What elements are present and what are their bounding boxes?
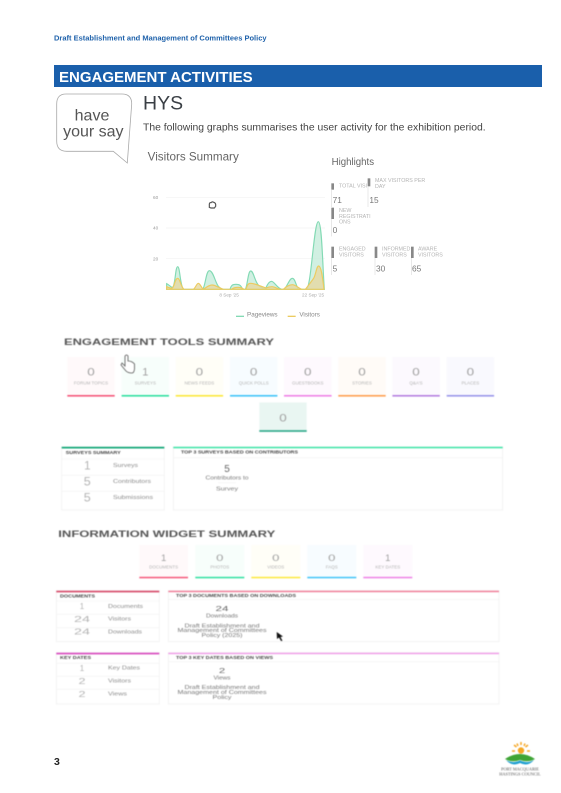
chart legend (236, 311, 320, 318)
panel: top key dates by views: 2 (219, 666, 225, 675)
panel: top key dates by views (168, 653, 499, 704)
card: photos (195, 545, 244, 578)
card: videos: 0 (272, 553, 279, 564)
heading: visitors summary: Visitors Summary (148, 150, 239, 163)
card: forum topics: FORUM TOPICS (74, 380, 108, 386)
card: places (447, 357, 494, 397)
area chart: 40 (153, 226, 159, 231)
card: key dates: KEY DATES (375, 564, 400, 569)
card: stories (338, 357, 386, 397)
panel: surveys summary: SURVEYS SUMMARY (66, 450, 121, 455)
panel: surveys summary: 1 (84, 460, 91, 472)
card: FAQs: FAQS (326, 564, 338, 569)
card: photos: 0 (216, 553, 223, 564)
card: extra tool: 0 (279, 412, 287, 424)
panel: top surveys by contributors: Survey (216, 487, 238, 493)
panel: top surveys by contributors: TOP 3 SURVEYS BASED ON CONTRIBUTORS (181, 450, 298, 455)
stat: aware visitors: 65 (412, 263, 422, 273)
intro text: The following graphs summarises the user activity for the exhibition period. (143, 122, 486, 134)
chart legend: Visitors (299, 311, 320, 318)
card: stories: STORIES (352, 380, 372, 386)
panel: surveys summary: Submissions (113, 495, 153, 501)
card: news feeds: NEWS FEEDS (185, 380, 214, 386)
stat: new registrations (331, 208, 371, 236)
icon: have your say speech bubble (57, 94, 132, 163)
panel: top surveys by contributors: Contributors to (206, 475, 248, 481)
stat: aware visitors: AWARE (418, 247, 438, 253)
card: surveys: 1 (142, 367, 148, 379)
stat: aware visitors (411, 247, 443, 275)
card: news feeds: 0 (196, 367, 203, 379)
stat: engaged visitors: ENGAGED (339, 247, 366, 253)
logo: Port Macquarie Hastings Council: PORT MACQUARIE (501, 766, 539, 772)
panel: top key dates by views: Management of Committees (178, 690, 267, 696)
panel: key dates: 1 (80, 664, 85, 673)
panel: documents (56, 591, 159, 642)
panel: top documents by downloads: Draft Establishment and (184, 623, 260, 629)
heading: highlights: Highlights (332, 157, 374, 168)
panel: documents: Downloads (108, 630, 142, 636)
card: quick polls: QUICK POLLS (239, 380, 269, 386)
panel: top documents by downloads: 24 (216, 604, 228, 613)
card: surveys (122, 357, 169, 397)
card: key dates (363, 545, 412, 578)
card: guestbooks (284, 357, 332, 397)
card: FAQs: 0 (328, 553, 335, 564)
panel: surveys summary: 5 (84, 493, 91, 505)
panel: key dates: Key Dates (108, 666, 140, 672)
panel: surveys summary: 5 (84, 477, 91, 489)
icon: have your say speech bubble: have (75, 107, 109, 124)
panel: top key dates by views: Views (214, 675, 231, 681)
card: quick polls: 0 (250, 367, 257, 379)
heading: HYS: HYS (143, 92, 183, 114)
card: documents: DOCUMENTS (149, 564, 178, 569)
panel: information widget summary (56, 529, 499, 704)
panel: visitors summary and highlights (148, 150, 443, 318)
area chart: 20 (153, 256, 159, 261)
icon: grab hand cursor (209, 202, 216, 208)
card: stories: 0 (358, 367, 366, 379)
chart legend: Pageviews (247, 311, 278, 318)
panel: key dates: 2 (78, 677, 86, 686)
card: extra tool (259, 402, 307, 432)
card: places: 0 (467, 367, 474, 379)
panel: top documents by downloads: Policy (2025) (202, 633, 243, 639)
stat: new registrations: NEW (339, 208, 352, 214)
card: Q&As: Q&A'S (409, 380, 423, 386)
panel: documents: 24 (74, 615, 91, 624)
card: news feeds (176, 357, 223, 397)
logo: Port Macquarie Hastings Council: HASTINGS COUNCIL (499, 772, 541, 776)
heading: information widget summary: INFORMATION WIDGET SUMMARY (58, 529, 276, 540)
panel: top documents by downloads: Downloads (206, 614, 238, 620)
card: surveys: SURVEYS (135, 380, 156, 386)
panel: key dates: 2 (78, 690, 86, 699)
stat: max visitors per day: 15 (369, 195, 379, 205)
card: forum topics: 0 (87, 367, 95, 379)
heading: engagement tools summary: ENGAGEMENT TOOLS SUMMARY (64, 337, 275, 348)
panel: key dates: KEY DATES (60, 655, 91, 660)
panel: top surveys by contributors (173, 447, 503, 510)
card: Q&As (392, 357, 440, 397)
card: videos (251, 545, 300, 578)
panel: key dates: Views (108, 692, 127, 698)
card: FAQs (307, 545, 356, 578)
stat: total visitors (331, 183, 367, 207)
panel: top documents by downloads: Management of Committees (178, 628, 267, 634)
stat: aware visitors: VISITORS (418, 253, 443, 259)
stat: informed visitors: 30 (376, 263, 386, 273)
panel: documents: Visitors (108, 617, 131, 623)
panel: surveys summary: Contributors (113, 479, 151, 485)
panel: top key dates by views: Policy (212, 695, 232, 701)
card: forum topics (67, 357, 115, 397)
area chart: 60 (153, 195, 159, 200)
stat: informed visitors (375, 247, 411, 275)
stat: new registrations: 0 (333, 225, 338, 235)
card: places: PLACES (462, 380, 479, 386)
stat: engaged visitors: VISITORS (339, 253, 364, 259)
card: key dates: 1 (385, 553, 390, 564)
panel: engagement tools summary (62, 337, 503, 510)
icon: arrow cursor (277, 632, 283, 641)
panel: documents: Documents (108, 604, 143, 610)
area chart (153, 195, 325, 298)
stat: new registrations: REGISTRATI (339, 214, 371, 220)
card: photos: PHOTOS (210, 564, 229, 569)
panel: documents: 1 (80, 602, 85, 611)
card: guestbooks: 0 (304, 367, 312, 379)
icon: pointer hand cursor (121, 355, 134, 373)
page header: Draft Establishment and Management of Committees Policy (54, 34, 267, 42)
card: documents (139, 545, 188, 578)
area chart: 22 Sep '25 (302, 293, 325, 298)
stat: engaged visitors: 5 (333, 263, 338, 273)
panel: top documents by downloads: TOP 3 DOCUMENTS BASED ON DOWNLOADS (176, 593, 296, 598)
panel: documents: 24 (74, 628, 91, 636)
stat: total visitors: 71 (333, 195, 342, 205)
stat: max visitors per day (368, 178, 425, 207)
card: quick polls (230, 357, 277, 397)
panel: top documents by downloads (168, 591, 499, 642)
stat: max visitors per day: MAX VISITORS PER (375, 178, 425, 184)
panel: top key dates by views: Draft Establishment and (184, 685, 260, 691)
stat: max visitors per day: DAY (375, 184, 386, 190)
card: videos: VIDEOS (267, 564, 284, 569)
panel: top surveys by contributors: 5 (224, 464, 230, 475)
panel: key dates: Visitors (108, 679, 131, 685)
page number: 3 (54, 756, 60, 768)
panel: surveys summary: Surveys (113, 463, 138, 469)
stat: total visitors: TOTAL VISI (339, 184, 367, 190)
section banner: ENGAGEMENT ACTIVITIES (59, 69, 253, 86)
panel: key dates (56, 653, 159, 704)
card: guestbooks: GUESTBOOKS (292, 380, 324, 386)
icon: have your say speech bubble: your say (63, 123, 124, 140)
area chart: 8 Sep '25 (219, 293, 239, 298)
stat: new registrations: ONS (339, 220, 351, 226)
stat: engaged visitors (331, 247, 366, 275)
panel: top key dates by views: TOP 3 KEY DATES BASED ON VIEWS (176, 655, 273, 660)
card: documents: 1 (161, 553, 166, 564)
panel: documents: DOCUMENTS (60, 593, 95, 598)
card: Q&As: 0 (412, 367, 420, 379)
logo: Port Macquarie Hastings Council (499, 742, 541, 776)
panel: surveys summary (62, 447, 164, 510)
stat: informed visitors: INFORMED (382, 247, 411, 253)
stat: informed visitors: VISITORS (382, 253, 407, 259)
section banner (54, 65, 542, 87)
